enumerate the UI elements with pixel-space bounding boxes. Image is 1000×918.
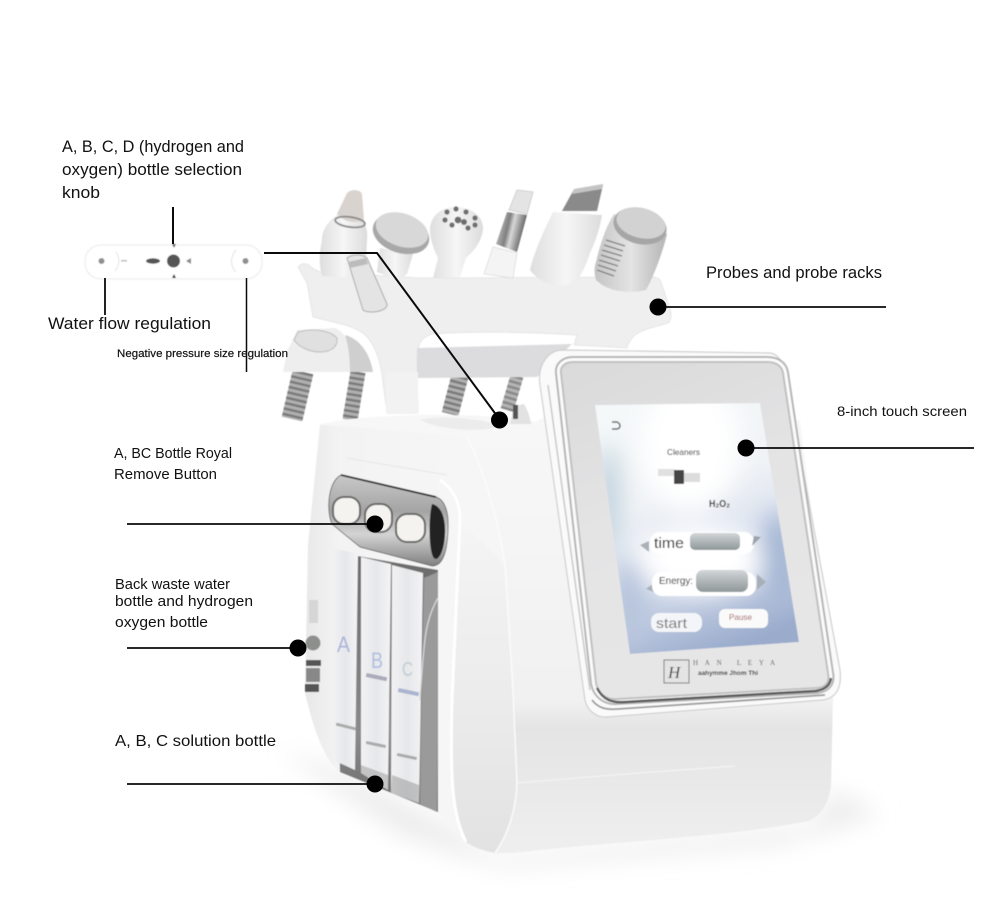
probe 3: ball head [430, 206, 483, 278]
brand logo: aahymme Jhom Thi [698, 670, 758, 677]
probe 1: nozzle [320, 190, 387, 312]
time control: time [654, 536, 684, 552]
icon: water flow dial [98, 258, 104, 264]
label: remove button [114, 446, 232, 483]
start button [651, 613, 702, 632]
label: waste water bottle: oxygen bottle [115, 615, 208, 631]
probe 2: round pad [368, 206, 434, 280]
machine body [305, 410, 833, 854]
probe rack [283, 264, 671, 414]
label: bottle selection knob: knob [62, 184, 100, 202]
probe 4: injector [484, 190, 533, 278]
bottle bay [333, 548, 438, 812]
infographic: hydrogen-oxygen facial machine parts diagram [48, 140, 974, 856]
machine illustration [280, 184, 880, 868]
start button: start [656, 615, 687, 631]
label: water flow regulation: Water flow regulation [48, 315, 211, 333]
pause button [719, 609, 768, 628]
probe 6: threaded cap [594, 202, 671, 292]
brand logo [664, 659, 775, 683]
bottle bay: A [337, 632, 350, 657]
top valve fitting [510, 404, 531, 424]
touch screen tablet [540, 350, 840, 717]
label: H2O2: H₂O₂ [709, 498, 730, 510]
label: probes and probe racks: Probes and probe racks [706, 264, 882, 282]
icon: probe tip [658, 469, 700, 484]
control panel strip [85, 244, 262, 279]
icon: selection knob [167, 254, 180, 268]
icon: back arrow [612, 422, 620, 429]
bottle bay: B [371, 648, 383, 673]
callout dots [290, 298, 754, 792]
label: remove button: Remove Button [114, 467, 217, 483]
bottle bay: C [402, 659, 413, 681]
label: waste water bottle: bottle and hydrogen [115, 594, 253, 610]
energy control: Energy: [659, 575, 693, 587]
back coil cables [292, 372, 517, 420]
label: bottle selection knob: oxygen) bottle selection [62, 161, 242, 179]
label: bottle selection knob: A, B, C, D (hydrogen and [62, 138, 244, 156]
screen display [595, 380, 799, 654]
probe 5: ultrasonic spatula [530, 184, 603, 286]
label: bottle selection knob [62, 138, 244, 202]
energy control [646, 570, 766, 596]
label: touch screen: 8-inch touch screen [837, 403, 967, 419]
callout lines [105, 207, 974, 784]
label: waste water bottle: Back waste water [115, 577, 230, 593]
side label plates [305, 600, 321, 692]
heading: cleaners: Cleaners [667, 447, 700, 457]
label: solution bottle: A, B, C solution bottle [115, 733, 276, 750]
label: remove button: A, BC Bottle Royal [114, 446, 232, 462]
icon: negative pressure dial [242, 258, 248, 264]
chrome button bar [329, 475, 448, 566]
time control [640, 532, 761, 554]
brand logo: HAN LEYA [693, 659, 775, 667]
brand logo: H [667, 663, 682, 682]
label: negative pressure: Negative pressure size regulation [117, 348, 288, 360]
floor shadow [280, 750, 880, 868]
label: waste water bottle [115, 577, 253, 631]
pause button: Pause [729, 612, 752, 622]
